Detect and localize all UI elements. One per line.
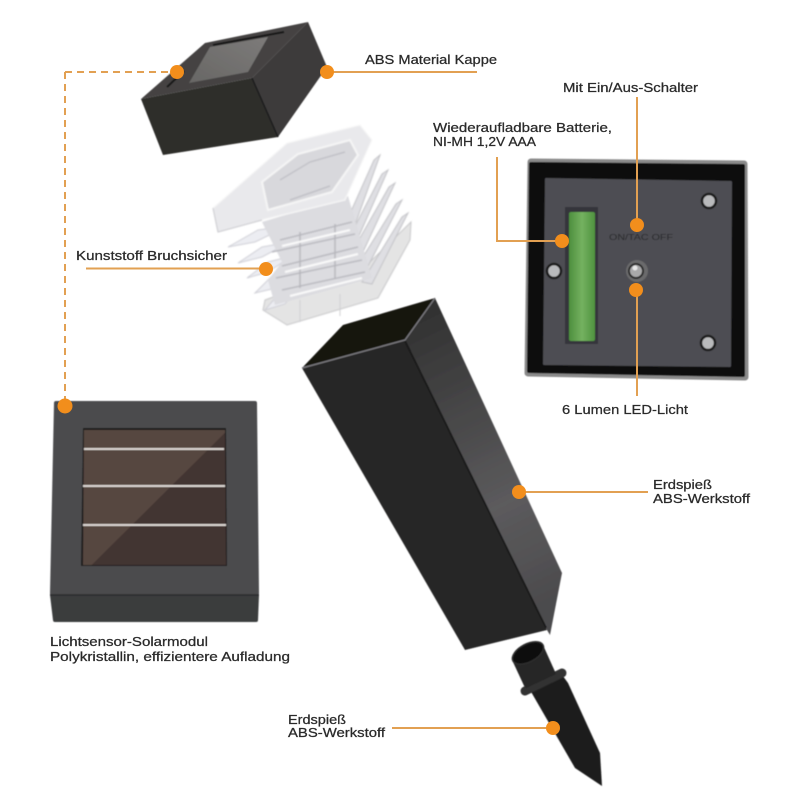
label: tube material: ABS-Werkstoff bbox=[653, 492, 751, 506]
green battery bbox=[569, 212, 595, 341]
connector lines bbox=[65, 72, 648, 728]
label: battery: Wiederaufladbare Batterie, bbox=[433, 121, 612, 135]
right fins bbox=[348, 155, 408, 284]
label: spike material bbox=[288, 713, 386, 740]
battery slot bbox=[565, 207, 598, 344]
label: solar module: Polykristallin, effizientere Aufladung bbox=[50, 650, 290, 664]
icon: clear plastic diffuser bbox=[213, 125, 411, 325]
label: plastic: Kunststoff Bruchsicher bbox=[76, 249, 227, 263]
label: battery bbox=[433, 121, 612, 149]
label: battery: NI-MH 1,2V AAA bbox=[433, 135, 537, 149]
top plate bbox=[213, 125, 372, 232]
label: cap material: ABS Material Kappe bbox=[365, 53, 497, 67]
icon: solar module bbox=[50, 403, 259, 620]
label: tube material: Erdspieß bbox=[653, 478, 712, 492]
icon: solar cap bbox=[141, 22, 327, 155]
switch marking: ON/TAC OFF bbox=[609, 233, 673, 242]
icon: screws bbox=[547, 194, 716, 350]
label: solar module bbox=[50, 635, 290, 664]
icon: ground stake tube bbox=[302, 298, 562, 650]
icon: LED switch bbox=[626, 260, 648, 282]
label: LED: 6 Lumen LED-Licht bbox=[562, 403, 689, 417]
label: tube material bbox=[653, 478, 751, 506]
left fins bbox=[228, 226, 300, 310]
icon: ground spike bbox=[509, 637, 602, 786]
icon: back panel with battery and switch bbox=[528, 162, 745, 377]
base plate bbox=[263, 222, 411, 325]
label: spike material: ABS-Werkstoff bbox=[288, 726, 386, 740]
label: spike material: Erdspieß bbox=[288, 713, 346, 727]
centre column bbox=[262, 196, 372, 305]
marker dots bbox=[58, 65, 644, 735]
label: switch: Mit Ein/Aus-Schalter bbox=[563, 81, 698, 95]
label: solar module: Lichtsensor-Solarmodul bbox=[50, 635, 208, 649]
